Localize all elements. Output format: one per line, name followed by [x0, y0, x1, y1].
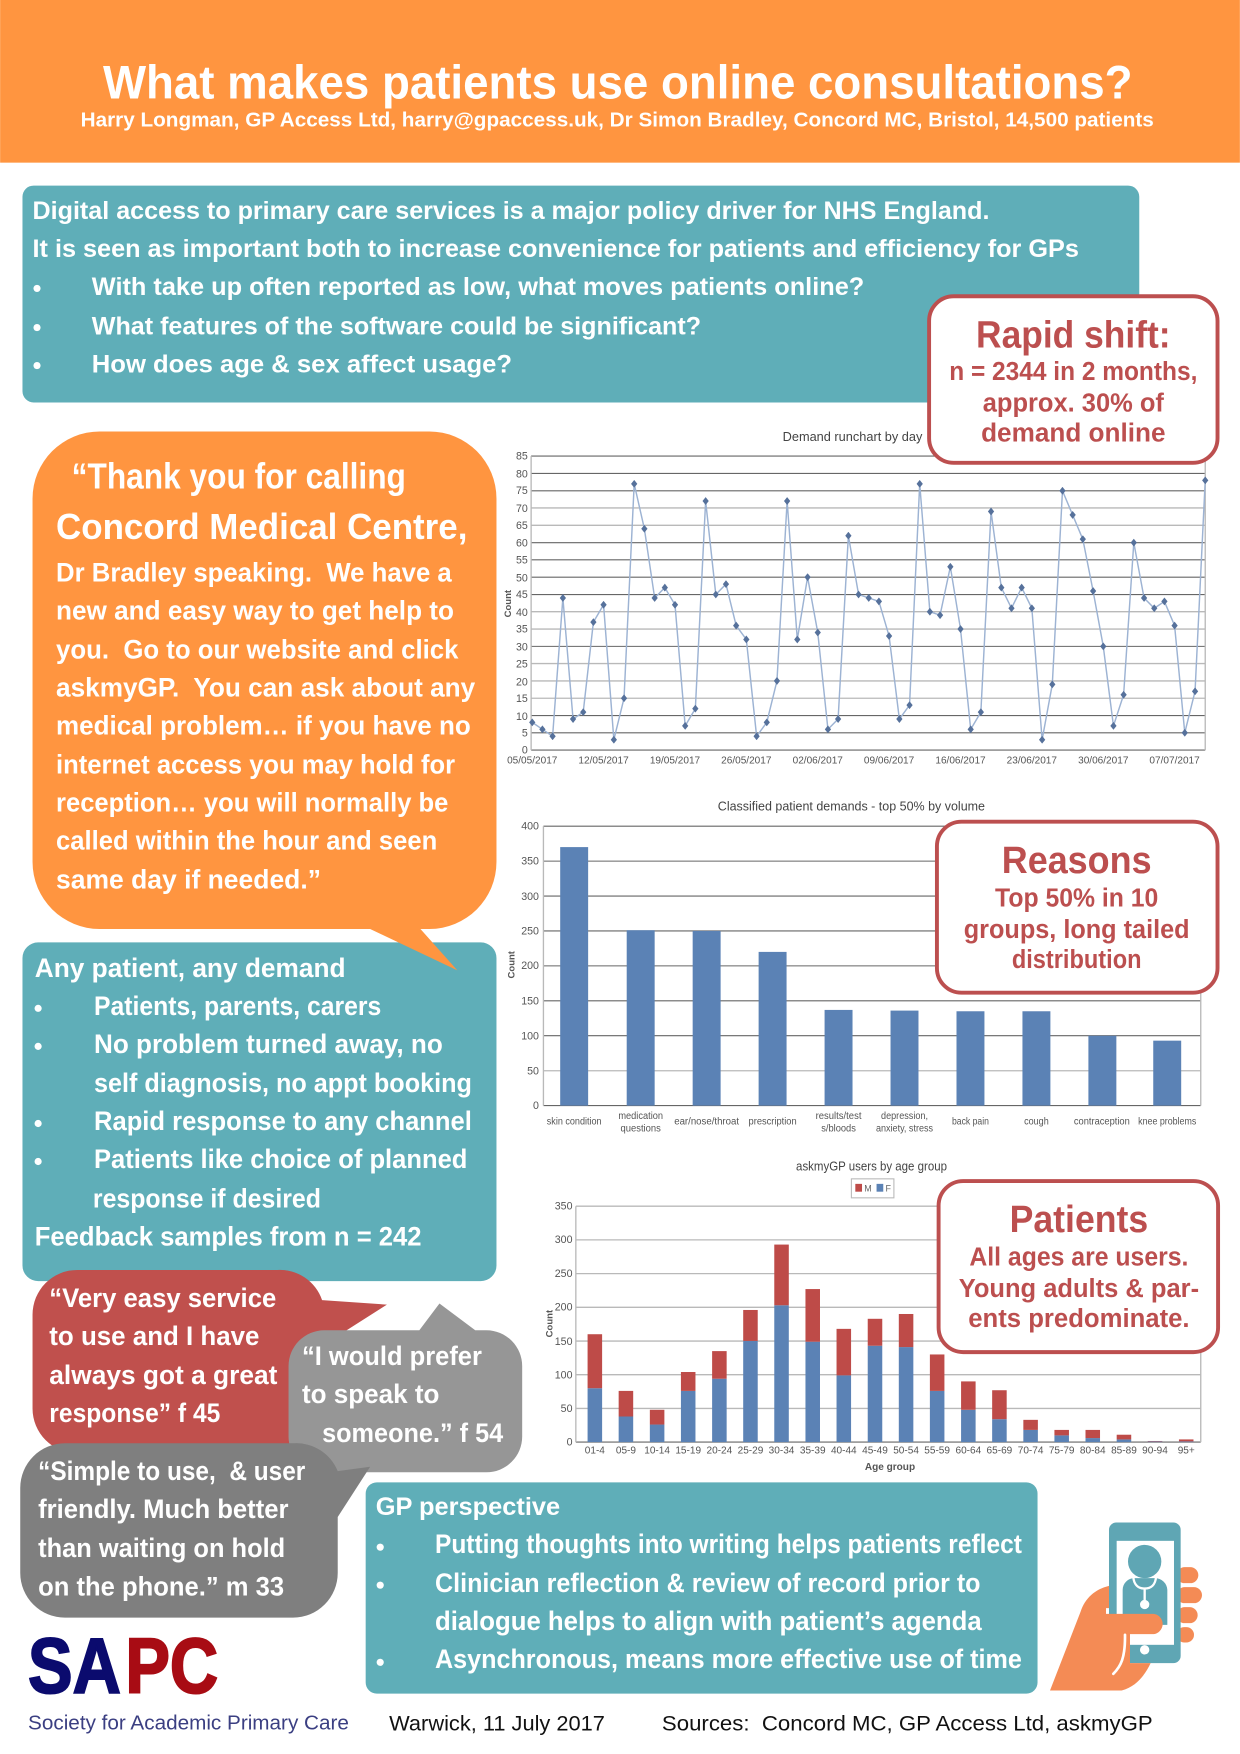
chart: users by age group: 90-94 [1142, 1445, 1168, 1456]
chart: users by age group: 100 [555, 1369, 573, 1381]
speech bubble: simple to use: than waiting on hold [38, 1533, 285, 1563]
speech bubble: simple to use: on the phone.” m 33 [38, 1571, 284, 1601]
panel: any patient, any demand: self diagnosis, no appt booking [94, 1068, 472, 1098]
chart: classified patient demands: s/bloods [821, 1123, 856, 1134]
callout: rapid shift: demand online [981, 420, 1166, 448]
speech bubble: receptionist message: called within the hour and seen [56, 826, 437, 856]
speech bubble: prefer to speak: to speak to [302, 1379, 439, 1409]
chart: classified patient demands: 150 [521, 995, 539, 1007]
chart: users by age group [544, 1158, 1201, 1473]
chart: classified patient demands: 0 [533, 1100, 539, 1112]
chart: classified patient demands: Classified patient demands - top 50% by volume [718, 798, 985, 813]
header banner [0, 0, 1240, 163]
callout: reasons: distribution [1012, 946, 1142, 974]
speech bubble: receptionist message: Dr Bradley speaking. We have a [56, 557, 453, 587]
chart: demand runchart by day: 85 [516, 450, 528, 462]
speech bubble: very easy service: response” f 45 [49, 1398, 220, 1428]
chart: classified patient demands: 200 [521, 960, 539, 972]
logo: SAPC: SA [28, 1622, 121, 1710]
chart: users by age group: 10-14 [644, 1445, 670, 1456]
panel: introduction: It is seen as important both to increase convenience for patients and efficiency for GPs [33, 235, 1079, 263]
chart: demand runchart by day: 19/05/2017 [650, 756, 701, 767]
speech bubble: simple to use: friendly. Much better [38, 1494, 289, 1524]
chart: users by age group: Count [544, 1309, 555, 1337]
chart: classified patient demands: questions [621, 1123, 661, 1134]
panel: GP perspective: Putting thoughts into writing helps patients reflect [435, 1529, 1022, 1559]
callout: rapid shift: Rapid shift: [976, 315, 1171, 357]
panel: introduction: What features of the software could be significant? [92, 312, 701, 340]
chart: demand runchart by day: 75 [516, 485, 528, 497]
chart: users by age group: 35-39 [800, 1445, 826, 1456]
chart: demand runchart by day: 80 [516, 468, 528, 480]
chart: demand runchart by day: 55 [516, 554, 528, 566]
chart: users by age group: askmyGP users by age group [796, 1158, 947, 1173]
panel: GP perspective: dialogue helps to align with patient’s agenda [435, 1606, 983, 1636]
panel: any patient, any demand: response if desired [93, 1183, 321, 1213]
chart: demand runchart by day: 25 [516, 658, 528, 670]
speech bubble: receptionist message: “Thank you for calling [72, 457, 406, 497]
panel: any patient, any demand: Feedback samples from n = 242 [35, 1221, 422, 1251]
chart: users by age group: 350 [555, 1201, 573, 1213]
chart: demand runchart by day: 20 [516, 676, 528, 688]
authors subtitle: Harry Longman, GP Access Ltd, harry@gpaccess.uk, Dr Simon Bradley, Concord MC, Bristol, 14,500 patients [81, 109, 1154, 131]
chart: classified patient demands: 350 [521, 856, 539, 868]
panel: any patient, any demand: Rapid response to any channel [94, 1106, 472, 1136]
chart: users by age group: 95+ [1178, 1445, 1195, 1456]
chart: users by age group: 250 [555, 1268, 573, 1280]
chart: classified patient demands: 250 [521, 926, 539, 938]
chart: demand runchart by day: 07/07/2017 [1149, 756, 1200, 767]
chart: demand runchart by day: Demand runchart by day [783, 429, 923, 444]
chart: classified patient demands: ear/nose/throat [674, 1117, 739, 1128]
chart: demand runchart by day: 30/06/2017 [1078, 756, 1129, 767]
chart: classified patient demands: medication [618, 1111, 663, 1122]
chart: users by age group: Age group [865, 1462, 915, 1473]
panel: GP perspective: Asynchronous, means more effective use of time [435, 1644, 1022, 1674]
chart: users by age group: 50 [561, 1403, 573, 1415]
chart: demand runchart by day: 05/05/2017 [507, 756, 558, 767]
speech bubble: receptionist message [33, 432, 496, 970]
chart: users by age group: 60-64 [955, 1445, 982, 1456]
speech bubble: receptionist message: Concord Medical Centre, [56, 507, 467, 547]
chart: classified patient demands: skin condition [547, 1117, 602, 1128]
title: What makes patients use online consultations? [103, 55, 1133, 108]
callout: reasons [937, 822, 1218, 993]
chart: demand runchart by day: 16/06/2017 [935, 756, 986, 767]
chart: classified patient demands: 100 [521, 1031, 539, 1043]
chart: demand runchart by day: 5 [522, 728, 528, 740]
chart: demand runchart by day: 26/05/2017 [721, 756, 772, 767]
chart legend: F [886, 1184, 892, 1194]
panel: introduction [22, 186, 1139, 402]
speech bubble: very easy service [33, 1270, 387, 1453]
chart: demand runchart by day: 02/06/2017 [793, 756, 843, 767]
chart: classified patient demands: 50 [527, 1065, 539, 1077]
speech bubble: prefer to speak: someone.” f 54 [322, 1418, 503, 1448]
callout: rapid shift [929, 296, 1218, 463]
chart: demand runchart by day: 50 [516, 572, 528, 584]
speech bubble: very easy service: to use and I have [49, 1321, 259, 1351]
chart legend: M [864, 1184, 872, 1194]
logo: SAPC: PC [125, 1622, 218, 1710]
speech bubble: receptionist message: you. Go to our website and click [56, 634, 459, 664]
chart: users by age group: 45-49 [862, 1445, 888, 1456]
chart: demand runchart by day: 40 [516, 607, 528, 619]
chart: classified patient demands: 400 [521, 820, 539, 832]
chart: demand runchart by day: 10 [516, 711, 528, 723]
chart: classified patient demands: back pain [952, 1117, 989, 1128]
chart: users by age group: 25-29 [738, 1445, 764, 1456]
chart: users by age group: 150 [555, 1336, 573, 1348]
chart: demand runchart by day: 65 [516, 520, 528, 532]
chart: demand runchart by day: 09/06/2017 [864, 756, 915, 767]
speech bubble: receptionist message: reception… you will normally be [56, 788, 448, 818]
speech bubble: receptionist message: medical problem… if you have no [56, 710, 471, 740]
chart: demand runchart by day: 30 [516, 642, 528, 654]
callout: patients [939, 1181, 1218, 1352]
chart: classified patient demands: results/test [816, 1111, 862, 1122]
chart: demand runchart by day: 12/05/2017 [578, 756, 629, 767]
callout: patients: All ages are users. [969, 1243, 1188, 1271]
chart: users by age group: 300 [555, 1234, 573, 1246]
chart: classified patient demands [506, 798, 1201, 1134]
speech bubble: prefer to speak: “I would prefer [302, 1341, 482, 1371]
chart: demand runchart by day: 70 [516, 503, 528, 515]
chart: demand runchart by day: 45 [516, 589, 528, 601]
panel: GP perspective: GP perspective [376, 1493, 560, 1521]
chart: classified patient demands: depression, [881, 1111, 928, 1122]
chart: users by age group: 01-4 [585, 1445, 605, 1456]
chart: users by age group: 80-84 [1080, 1445, 1106, 1456]
callout: reasons: groups, long tailed [964, 916, 1190, 944]
callout: patients: ents predominate. [968, 1305, 1190, 1333]
panel: GP perspective: Clinician reflection & review of record prior to [435, 1568, 981, 1598]
chart: users by age group: 50-54 [893, 1445, 919, 1456]
callout: rapid shift: n = 2344 in 2 months, [949, 358, 1197, 386]
chart: users by age group: 20-24 [707, 1445, 733, 1456]
speech bubble: prefer to speak [289, 1303, 522, 1472]
chart: classified patient demands: prescription [749, 1117, 797, 1128]
chart: users by age group: 85-89 [1111, 1445, 1137, 1456]
icon: hand holding phone with doctor [1050, 1523, 1202, 1690]
chart: users by age group: 40-44 [831, 1445, 857, 1456]
logo: SAPC [28, 1622, 349, 1734]
chart: demand runchart by day [503, 429, 1205, 767]
chart: demand runchart by day: 35 [516, 624, 528, 636]
speech bubble: very easy service: “Very easy service [49, 1283, 276, 1313]
chart: users by age group: 55-59 [924, 1445, 950, 1456]
chart: classified patient demands: cough [1024, 1117, 1049, 1128]
panel: introduction: How does age & sex affect usage? [92, 350, 512, 378]
chart: users by age group: 15-19 [675, 1445, 701, 1456]
panel: any patient, any demand [22, 942, 496, 1281]
panel: any patient, any demand: Patients, parents, carers [94, 991, 381, 1021]
chart: classified patient demands: anxiety, stress [876, 1123, 933, 1134]
chart: classified patient demands: knee problems [1138, 1117, 1196, 1128]
chart: users by age group: 0 [567, 1436, 573, 1448]
chart: classified patient demands: 300 [521, 891, 539, 903]
speech bubble: receptionist message: same day if needed.” [56, 865, 321, 895]
speech bubble: simple to use [20, 1443, 370, 1618]
footer: sources: Sources: Concord MC, GP Access Ltd, askmyGP [662, 1712, 1153, 1736]
chart: demand runchart by day: 15 [516, 693, 528, 705]
callout: reasons: Reasons [1002, 840, 1152, 882]
speech bubble: receptionist message: new and easy way to get help to [56, 595, 454, 625]
chart: demand runchart by day: 0 [522, 744, 528, 756]
chart legend [851, 1179, 894, 1198]
callout: patients: Patients [1010, 1199, 1148, 1241]
chart: users by age group: 65-69 [987, 1445, 1013, 1456]
speech bubble: very easy service: always got a great [49, 1360, 277, 1390]
panel: GP perspective [366, 1482, 1038, 1694]
panel: introduction: Digital access to primary care services is a major policy driver for NHS England. [33, 197, 989, 225]
chart: demand runchart by day: 23/06/2017 [1007, 756, 1057, 767]
panel: any patient, any demand: Patients like choice of planned [94, 1144, 467, 1174]
chart: classified patient demands: contraception [1074, 1117, 1130, 1128]
callout: patients: Young adults & par- [959, 1275, 1199, 1303]
speech bubble: simple to use: “Simple to use, & user [38, 1456, 306, 1486]
speech bubble: receptionist message: internet access you may hold for [56, 750, 456, 780]
footer: date and place: Warwick, 11 July 2017 [389, 1712, 605, 1736]
callout: rapid shift: approx. 30% of [983, 389, 1164, 417]
panel: introduction: With take up often reported as low, what moves patients online? [92, 273, 864, 301]
chart: demand runchart by day: Count [503, 589, 514, 617]
chart: users by age group: 200 [555, 1302, 573, 1314]
logo: SAPC: Society for Academic Primary Care [28, 1711, 349, 1734]
panel: any patient, any demand: No problem turned away, no [94, 1029, 443, 1059]
chart: users by age group: 75-79 [1049, 1445, 1075, 1456]
chart: demand runchart by day: 60 [516, 538, 528, 550]
callout: reasons: Top 50% in 10 [995, 885, 1158, 913]
chart: users by age group: 30-34 [769, 1445, 795, 1456]
chart: users by age group: 70-74 [1018, 1445, 1044, 1456]
speech bubble: receptionist message: askmyGP. You can ask about any [56, 672, 475, 702]
chart: classified patient demands: Count [506, 950, 517, 978]
chart: users by age group: 05-9 [616, 1445, 636, 1456]
panel: any patient, any demand: Any patient, any demand [35, 953, 346, 983]
